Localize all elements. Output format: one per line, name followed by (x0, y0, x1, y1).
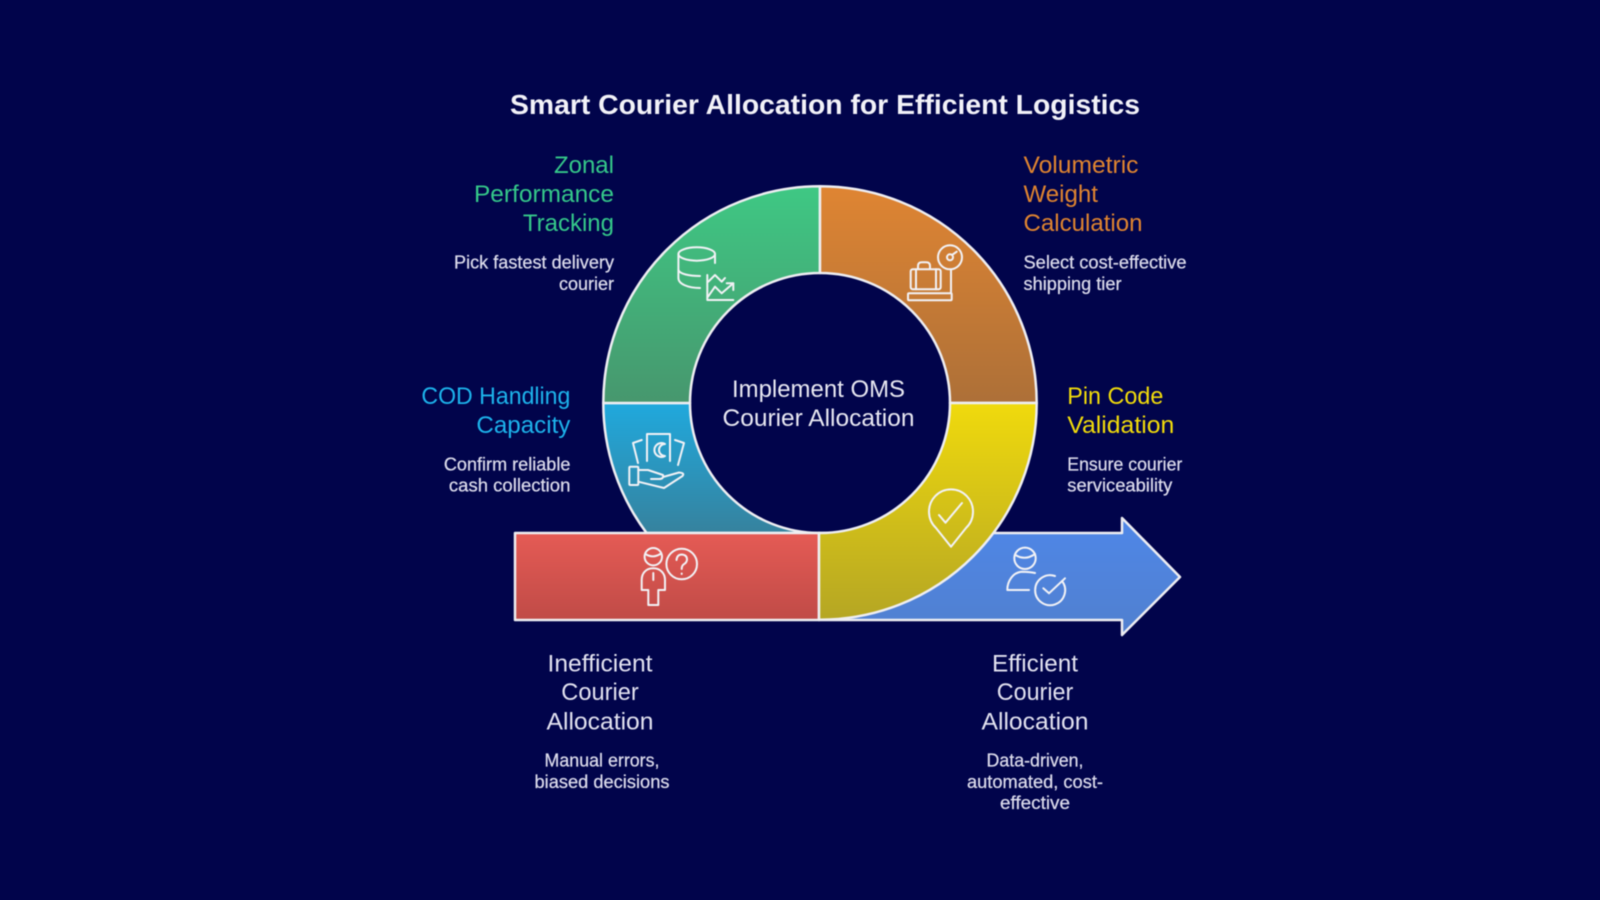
icon: database and chart (678, 247, 733, 300)
ring segment: volumetric weight (820, 186, 1037, 403)
label: pin code validation: Pin Code (1067, 383, 1163, 410)
label: pin code validation: Validation (1067, 412, 1174, 439)
icon: luggage scale (908, 245, 962, 300)
label: zonal performance tracking: Tracking (523, 210, 614, 237)
label: cod handling capacity (421, 383, 570, 496)
label: cod handling capacity: COD Handling (421, 383, 570, 410)
title: Smart Courier Allocation for Efficient Logistics (510, 89, 1140, 120)
label: zonal performance tracking: Performance (474, 181, 614, 208)
ring segment: zonal performance (603, 186, 820, 403)
label: efficient courier allocation: Courier (997, 679, 1073, 706)
label: zonal performance tracking: Zonal (554, 152, 614, 179)
label: efficient courier allocation (967, 650, 1103, 813)
label: inefficient courier allocation: Manual errors, (544, 750, 660, 770)
label: inefficient courier allocation: Allocation (546, 708, 654, 736)
icon: cash in hand (629, 434, 684, 488)
label: volumetric weight calculation: Select cost-effective (1024, 252, 1186, 272)
ring segment: pin code (819, 403, 1037, 620)
label: inefficient courier allocation: Inefficient (548, 650, 653, 678)
label: inefficient courier allocation (534, 650, 670, 792)
center text: Implement OMS (732, 376, 905, 403)
icon: approved person (1007, 548, 1065, 605)
icon: pin with check (929, 489, 973, 547)
label: cod handling capacity: cash collection (449, 476, 570, 496)
label: efficient courier allocation: Data-driven, (986, 750, 1084, 770)
label: cod handling capacity: Confirm reliable (444, 454, 570, 474)
icon: confused person (642, 548, 697, 605)
label: efficient courier allocation: Efficient (992, 650, 1078, 678)
label: inefficient courier allocation: Courier (561, 679, 639, 706)
label: efficient courier allocation: automated, cost- (967, 772, 1103, 792)
label: volumetric weight calculation: Weight (1024, 181, 1098, 208)
label: volumetric weight calculation (1024, 152, 1186, 294)
label: zonal performance tracking (454, 152, 614, 294)
label: zonal performance tracking: Pick fastest delivery (454, 252, 614, 272)
label: pin code validation: serviceability (1067, 476, 1172, 496)
arrow: efficient allocation (819, 518, 1180, 635)
ring segment: cod handling (603, 403, 820, 533)
label: inefficient courier allocation: biased decisions (534, 772, 670, 792)
center text: Courier Allocation (722, 405, 914, 432)
label: volumetric weight calculation: Calculation (1024, 210, 1142, 237)
label: zonal performance tracking: courier (559, 274, 614, 294)
label: efficient courier allocation: Allocation (982, 708, 1088, 736)
label: efficient courier allocation: effective (1000, 793, 1070, 813)
center text (722, 376, 914, 432)
label: cod handling capacity: Capacity (476, 412, 570, 439)
bar: inefficient allocation (515, 533, 819, 620)
label: pin code validation: Ensure courier (1067, 454, 1182, 474)
label: volumetric weight calculation: shipping tier (1024, 274, 1122, 294)
label: volumetric weight calculation: Volumetric (1024, 152, 1138, 179)
label: pin code validation (1067, 383, 1182, 496)
